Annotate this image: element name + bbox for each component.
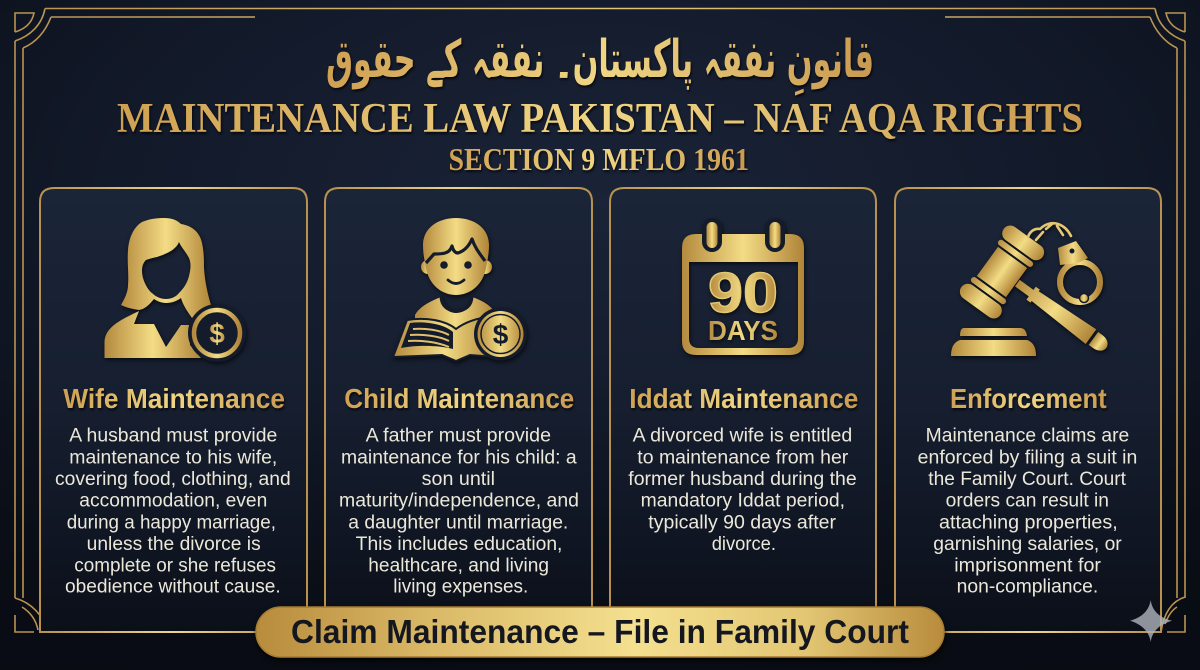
icon: child with book and coin bbox=[393, 218, 527, 361]
body text: living expenses. bbox=[393, 576, 528, 598]
heading: Child Maintenance bbox=[344, 383, 574, 414]
body text: maintenance to his wife, bbox=[69, 447, 277, 468]
icon: 90 days calendar: DAYS bbox=[708, 315, 778, 346]
heading: Enforcement bbox=[950, 383, 1107, 414]
panel: child maintenance bbox=[325, 188, 592, 632]
icon: sparkle watermark bbox=[1130, 600, 1172, 642]
icon: woman with coin bbox=[104, 218, 246, 362]
icon: child with book and coin: $ bbox=[493, 319, 509, 350]
body text: orders can result in bbox=[946, 491, 1109, 512]
subtitle: SECTION 9 MFLO 1961 bbox=[448, 141, 749, 177]
call to action banner bbox=[256, 607, 944, 657]
icon: gavel and handcuffs bbox=[951, 222, 1132, 383]
heading: Iddat Maintenance bbox=[629, 383, 858, 414]
panel: enforcement bbox=[895, 188, 1161, 632]
body text: A divorced wife is entitled bbox=[633, 426, 852, 447]
body text bbox=[55, 426, 291, 598]
body text: obedience without cause. bbox=[65, 576, 281, 598]
body text: typically 90 days after bbox=[648, 512, 837, 533]
body text: a daughter until marriage. bbox=[348, 512, 568, 533]
body text: enforced by filing a suit in bbox=[918, 447, 1137, 468]
panel: iddat maintenance bbox=[610, 188, 876, 632]
body text: son until bbox=[422, 469, 495, 490]
body text: Maintenance claims are bbox=[926, 426, 1129, 447]
body text: mandatory Iddat period, bbox=[641, 491, 845, 512]
call to action banner: Claim Maintenance – File in Family Court bbox=[291, 613, 909, 650]
body text bbox=[339, 426, 579, 598]
icon: 90 days calendar bbox=[682, 218, 804, 355]
panel: wife maintenance bbox=[40, 188, 307, 632]
body text: former husband during the bbox=[628, 469, 857, 490]
english title: MAINTENANCE LAW PAKISTAN – NAF AQA RIGHTS bbox=[117, 96, 1083, 142]
icon: 90 days calendar: 90 bbox=[708, 261, 778, 325]
body text: garnishing salaries, or bbox=[933, 534, 1122, 555]
body text: to maintenance from her bbox=[637, 447, 849, 468]
heading: Wife Maintenance bbox=[63, 383, 285, 414]
body text: during a happy marriage, bbox=[67, 512, 276, 533]
body text: This includes education, bbox=[356, 534, 562, 555]
body text bbox=[918, 426, 1137, 598]
body text bbox=[628, 426, 857, 555]
body text: healthcare, and living bbox=[368, 556, 549, 577]
body text: attaching properties, bbox=[939, 512, 1118, 533]
body text: divorce. bbox=[712, 534, 776, 555]
body text: unless the divorce is bbox=[87, 534, 261, 555]
body text: complete or she refuses bbox=[74, 556, 276, 577]
body text: covering food, clothing, and bbox=[55, 469, 291, 490]
body text: maturity/independence, and bbox=[339, 491, 579, 512]
body text: non-compliance. bbox=[957, 576, 1098, 598]
body text: accommodation, even bbox=[79, 491, 267, 512]
body text: A father must provide bbox=[366, 426, 551, 447]
body text: A husband must provide bbox=[69, 426, 277, 447]
body text: imprisonment for bbox=[954, 556, 1102, 577]
icon: woman with coin: $ bbox=[209, 318, 225, 349]
body text: the Family Court. Court bbox=[928, 469, 1127, 490]
body text: maintenance for his child: a bbox=[341, 447, 577, 468]
